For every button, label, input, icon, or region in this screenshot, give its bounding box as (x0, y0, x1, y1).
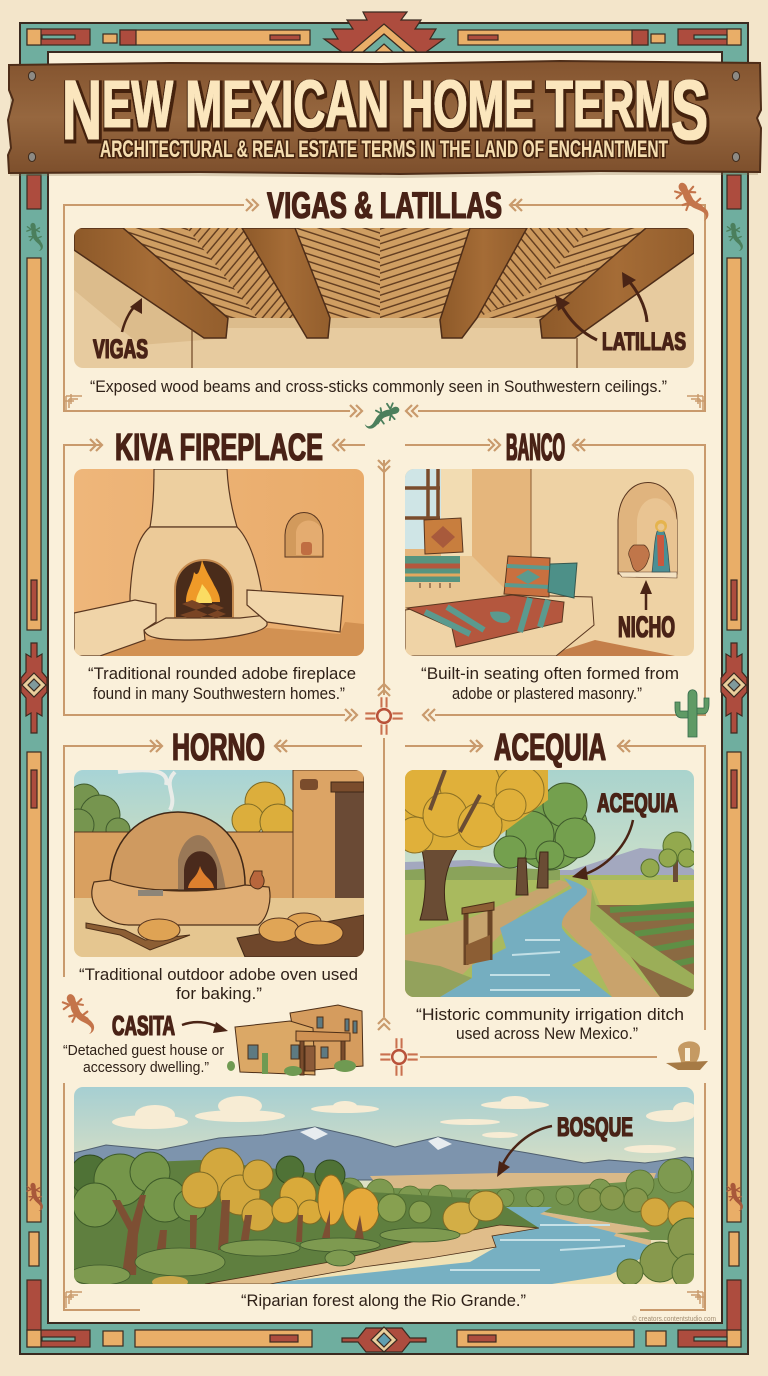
illustration: riparian forest (70, 1087, 712, 1290)
panel: casita (60, 990, 418, 1076)
caption: used across New Mexico.” (456, 1024, 638, 1043)
panel: banco (405, 427, 709, 737)
panel: acequia (397, 727, 708, 1085)
title banner: wood plank (8, 61, 761, 178)
panel: bosque (70, 1085, 716, 1323)
arrow (182, 1022, 228, 1033)
caption: “Historic community irrigation ditch (416, 1005, 684, 1024)
panel: vigas and latillas (64, 178, 710, 430)
illustration: ceiling beams (74, 228, 694, 368)
caption: accessory dwelling.” (83, 1059, 209, 1076)
illustration: kiva fireplace (74, 469, 364, 656)
panel: horno (62, 727, 364, 1310)
heading: CASITA (112, 1010, 175, 1041)
label: bosque (497, 1112, 633, 1177)
illustration: banco seat and nicho (405, 469, 694, 656)
caption: “Traditional rounded adobe fireplace (88, 664, 356, 683)
caption: found in many Southwestern homes.” (93, 684, 345, 703)
label: latillas (555, 272, 686, 356)
side ornaments (21, 643, 747, 1352)
icon: orange gecko (60, 990, 96, 1039)
top center stepped ornament (324, 12, 444, 52)
caption: “Built-in seating often formed from (421, 664, 679, 683)
panel: kiva fireplace (64, 427, 365, 721)
caption: “Detached guest house or (63, 1042, 224, 1059)
caption: “Exposed wood beams and cross-sticks commonly seen in Southwestern ceilings.” (90, 377, 667, 396)
label: acequia: ACEQUIA (597, 788, 678, 818)
heading: KIVA FIREPLACE (115, 427, 323, 469)
illustration: casita house (235, 1005, 363, 1075)
icon: zia sun (380, 1038, 418, 1076)
heading: HORNO (172, 727, 265, 769)
illustration: horno oven (62, 770, 364, 957)
title: S (671, 63, 708, 157)
illustration: irrigation ditch (397, 755, 696, 997)
caption (421, 664, 679, 703)
heading: VIGAS & LATILLAS (267, 185, 502, 226)
caption (88, 664, 356, 703)
caption: “Riparian forest along the Rio Grande.” (241, 1291, 526, 1310)
title: N (62, 63, 102, 157)
caption: adobe or plastered masonry.” (452, 684, 642, 703)
center divider (365, 460, 403, 1030)
icon: green gecko (362, 402, 402, 430)
caption (416, 1005, 684, 1043)
label: nicho: NICHO (618, 611, 675, 644)
icon: sketch figure (666, 1041, 708, 1070)
heading: ACEQUIA (494, 727, 606, 769)
label: bosque: BOSQUE (557, 1112, 633, 1142)
credit: © creators.contentstudio.com (632, 1315, 716, 1323)
icon: cactus (675, 690, 709, 737)
caption (79, 965, 358, 1003)
icon: zia sun (365, 697, 403, 735)
label: vigas (93, 298, 148, 364)
caption (63, 1042, 224, 1076)
caption: for baking.” (176, 984, 262, 1003)
label: vigas: VIGAS (93, 334, 148, 364)
label: nicho (618, 580, 675, 644)
label: acequia (572, 788, 678, 880)
caption: “Traditional outdoor adobe oven used (79, 965, 358, 984)
label: latillas: LATILLAS (602, 328, 686, 356)
panel: banco: BANCO (506, 427, 565, 469)
icon: orange gecko (672, 178, 710, 227)
frame (640, 1085, 705, 1310)
